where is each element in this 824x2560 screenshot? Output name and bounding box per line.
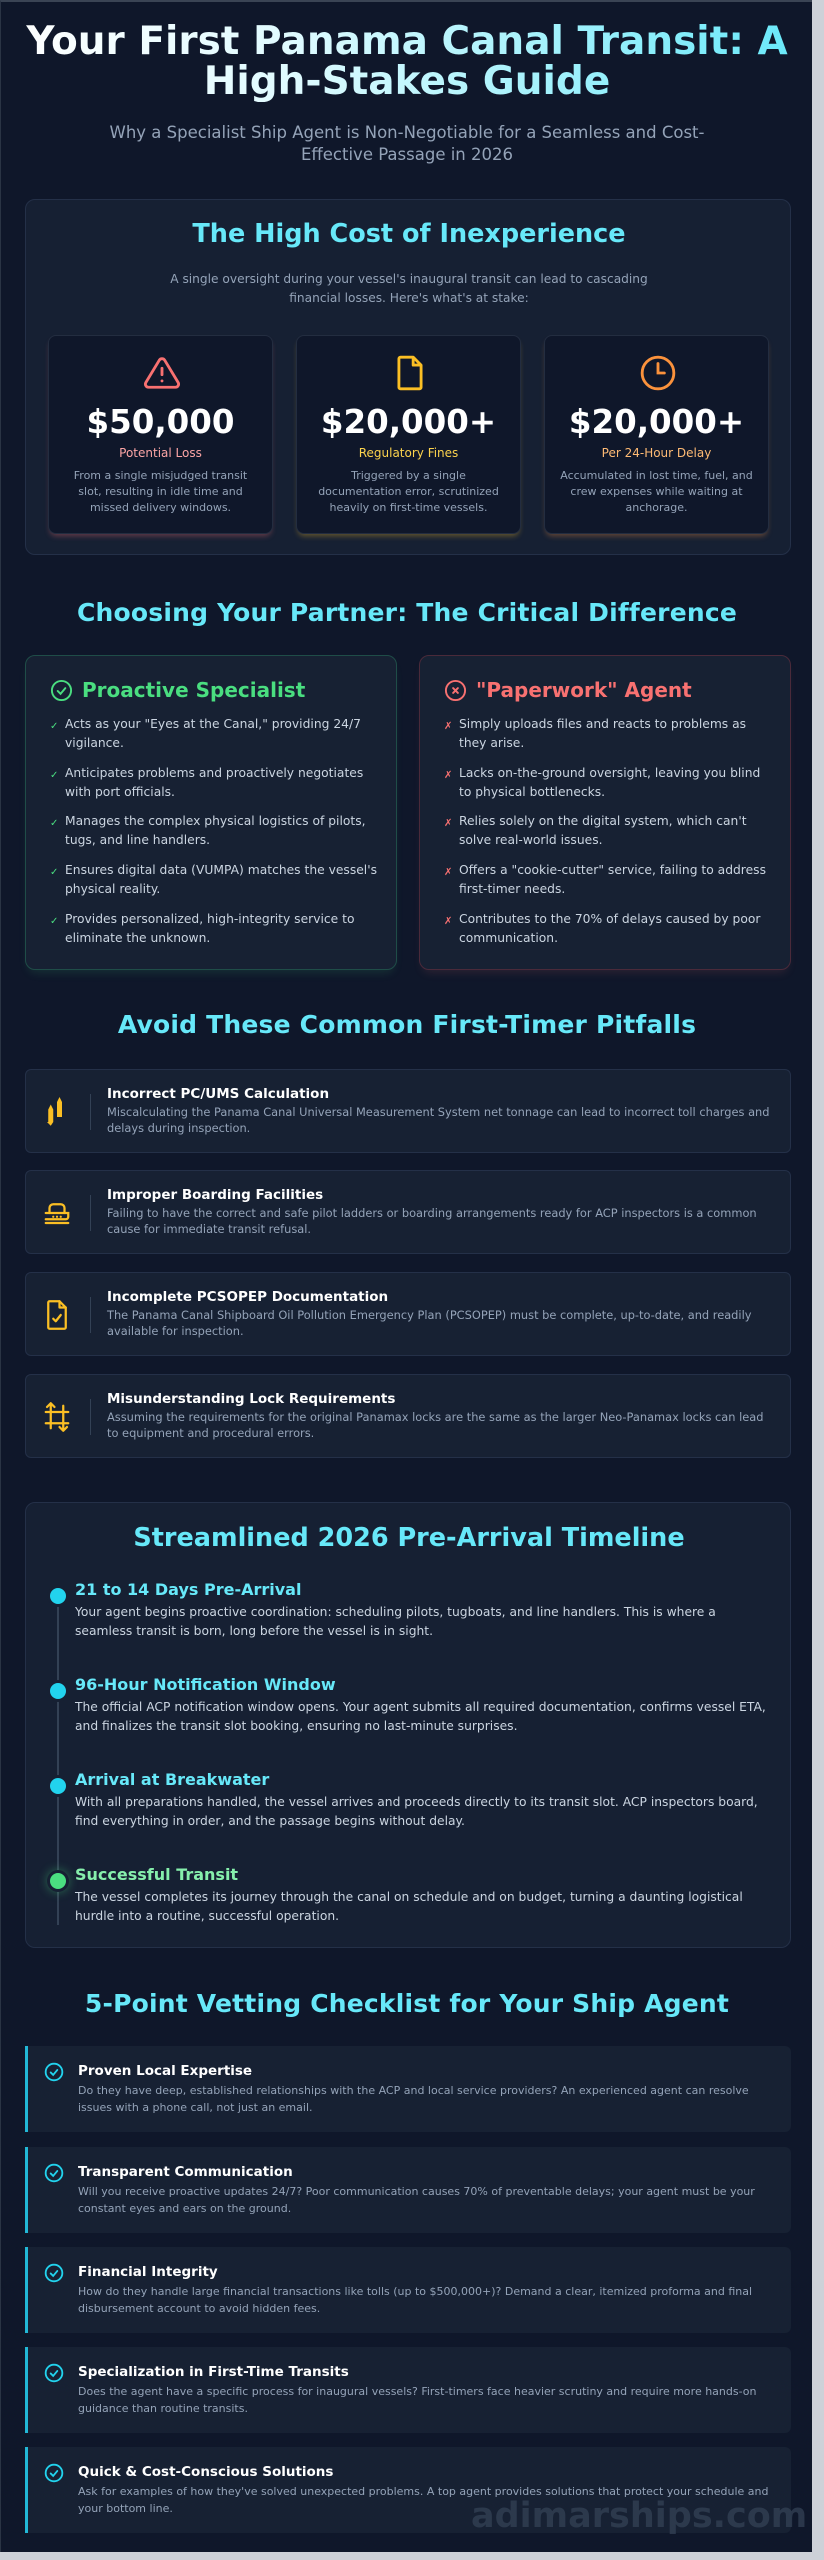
panel: proactive specialist: ✓ [50, 770, 58, 781]
panel: paperwork agent: ✗ [444, 721, 452, 732]
pitfall: PCSOPEP: The Panama Canal Shipboard Oil Pollution Emergency Plan (PCSOPEP) must be complete, up-to-date, and readily available for inspection. [107, 1308, 752, 1338]
panel: paperwork agent: ✗ [444, 818, 452, 829]
icon: warning [144, 357, 180, 389]
checklist 1: Proven Local Expertise [78, 2063, 252, 2079]
watermark: adimarships.com [471, 2496, 807, 2536]
pitfall: PCSOPEP: Incomplete PCSOPEP Documentation [107, 1289, 388, 1305]
card: regulatory fines: $20,000+ [321, 403, 496, 441]
checklist 3 [25, 2247, 791, 2333]
card: delay: $20,000+ [569, 403, 744, 441]
icon: check circle [50, 680, 72, 701]
checklist 5: Quick & Cost-Conscious Solutions [78, 2464, 333, 2480]
panel: paperwork agent: "Paperwork" Agent [476, 678, 692, 702]
icon: clock [640, 356, 676, 390]
panel: proactive specialist: Anticipates problems and proactively negotiates with port officials. [65, 766, 363, 799]
step 2 [50, 1675, 766, 1733]
icon: doc check [47, 1300, 67, 1330]
panel: timeline: Successful Transit [75, 1865, 238, 1884]
checklist 5 [25, 2447, 791, 2533]
card: potential loss: Potential Loss [119, 446, 202, 460]
checklist 2: Transparent Communication [78, 2164, 293, 2180]
panel: paperwork agent: ✗ [444, 867, 452, 878]
panel: high cost [25, 199, 791, 555]
panel: timeline: Your agent begins proactive coordination: scheduling pilots, tugboats, and line handlers. This is where a seamless transit is born, long before the vessel is in sight. [75, 1605, 716, 1638]
intro text: A single oversight during your vessel's inaugural transit can lead to cascading financial losses. Here's what's at stake: [170, 272, 648, 305]
checklist 3: Financial Integrity [78, 2264, 218, 2280]
checklist 4: Specialization in First-Time Transits [78, 2364, 349, 2380]
step 3 [50, 1770, 758, 1828]
card: delay: Per 24-Hour Delay [602, 446, 711, 460]
icon: lock arrows [44, 1402, 70, 1432]
checklist 5: Ask for examples of how they've solved unexpected problems. A top agent provides solutions that protect your schedule and your bottom line. [78, 2485, 768, 2515]
card: regulatory fines: Triggered by a single documentation error, scrutinized heavily on first-time vessels. [318, 469, 499, 514]
icon: x circle [444, 680, 466, 701]
icon: check [44, 2062, 64, 2082]
panel: paperwork agent: ✗ [444, 916, 452, 927]
panel: paperwork agent: Contributes to the 70% of delays caused by poor communication. [459, 912, 760, 945]
heading: choosing your partner: Choosing Your Partner: The Critical Difference [77, 598, 737, 627]
panel: proactive specialist: Ensures digital data (VUMPA) matches the vessel's physical reality. [65, 863, 377, 896]
card: delay [544, 335, 769, 534]
pitfall: PC/UMS [25, 1069, 791, 1153]
heading: timeline: Streamlined 2026 Pre-Arrival Timeline [133, 1523, 685, 1553]
pitfall: locks [25, 1374, 791, 1458]
panel: timeline [25, 1502, 791, 1948]
checklist 4: Does the agent have a specific process for inaugural vessels? First-timers face heavier scrutiny and require more hands-on guidance than routine transits. [78, 2385, 756, 2415]
panel: timeline: The vessel completes its journey through the canal on schedule and on budget, turning a daunting logistical hurdle into a routine, successful operation. [75, 1890, 743, 1923]
panel: timeline: With all preparations handled, the vessel arrives and proceeds directly to its transit slot. ACP inspectors board, find everything in order, and the passage begins without delay. [75, 1795, 758, 1828]
checklist 2 [25, 2147, 791, 2233]
icon: boarding [44, 1203, 70, 1224]
pitfall: boarding: Failing to have the correct and safe pilot ladders or boarding arrangements ready for ACP inspectors is a common cause for immediate transit refusal. [107, 1206, 757, 1236]
icon: check [44, 2164, 64, 2182]
heading: pitfalls: Avoid These Common First-Timer Pitfalls [118, 1010, 696, 1039]
panel: paperwork agent: Offers a "cookie-cutter" service, failing to address first-timer needs. [459, 863, 766, 896]
pitfall: PC/UMS: Incorrect PC/UMS Calculation [107, 1086, 329, 1102]
panel: proactive specialist [25, 655, 397, 970]
step 4 [42, 1865, 743, 1923]
panel: paperwork agent: Simply uploads files and reacts to problems as they arise. [459, 717, 746, 750]
panel: proactive specialist: Acts as your "Eyes at the Canal," providing 24/7 vigilance. [65, 717, 361, 750]
step 1 [50, 1580, 716, 1638]
pitfall: locks: Assuming the requirements for the original Panamax locks are the same as the larger Neo-Panamax locks can lead to equipment and procedural errors. [107, 1410, 764, 1440]
title: Your First Panama Canal Transit: A High-Stakes Guide [26, 19, 788, 104]
heading: high cost: The High Cost of Inexperience [192, 219, 626, 249]
card: regulatory fines [296, 335, 521, 534]
checklist 1 [25, 2046, 791, 2132]
panel: paperwork agent [419, 655, 791, 970]
panel: proactive specialist: ✓ [50, 916, 58, 927]
panel: proactive specialist: Manages the complex physical logistics of pilots, tugs, and line handlers. [65, 814, 366, 847]
panel: proactive specialist: ✓ [50, 867, 58, 878]
panel: timeline: 96-Hour Notification Window [75, 1675, 336, 1694]
panel: timeline: Arrival at Breakwater [75, 1770, 269, 1789]
icon: check [44, 2264, 64, 2282]
pitfall: locks: Misunderstanding Lock Requirements [107, 1391, 395, 1407]
checklist 2: Will you receive proactive updates 24/7? Poor communication causes 70% of preventable delays; your agent must be your constant eyes and ears on the ground. [78, 2185, 755, 2215]
icon: document [398, 356, 422, 390]
checklist 1: Do they have deep, established relationships with the ACP and local service providers? An experienced agent can resolve issues with a phone call, not just an email. [78, 2084, 749, 2114]
pitfall: PCSOPEP [25, 1272, 791, 1356]
panel: paperwork agent: Relies solely on the digital system, which can't solve real-world issues. [459, 814, 747, 847]
pitfall: PC/UMS: Miscalculating the Panama Canal Universal Measurement System net tonnage can lead to incorrect toll charges and delays during inspection. [107, 1105, 770, 1135]
panel: proactive specialist: Provides personalized, high-integrity service to eliminate the unknown. [65, 912, 354, 945]
icon: check [44, 2464, 64, 2482]
panel: proactive specialist: Proactive Specialist [82, 678, 305, 702]
checklist 3: How do they handle large financial transactions like tolls (up to $500,000+)? Demand a clear, itemized proforma and final disbursement account to avoid hidden fees. [78, 2285, 752, 2315]
card: regulatory fines: Regulatory Fines [359, 446, 458, 460]
panel: proactive specialist: ✓ [50, 721, 58, 732]
heading: checklist: 5-Point Vetting Checklist for Your Ship Agent [85, 1989, 729, 2018]
panel: paperwork agent: Lacks on-the-ground oversight, leaving you blind to physical bottlenecks. [459, 766, 760, 799]
checklist 4 [25, 2347, 791, 2433]
pitfall: boarding [25, 1170, 791, 1254]
panel: paperwork agent: ✗ [444, 770, 452, 781]
card: potential loss [48, 335, 273, 534]
icon: check [44, 2364, 64, 2382]
card: potential loss: From a single misjudged transit slot, resulting in idle time and missed delivery windows. [74, 469, 247, 514]
card: potential loss: $50,000 [86, 403, 235, 441]
panel: timeline: The official ACP notification window opens. Your agent submits all required documentation, confirms vessel ETA, and finalizes the transit slot booking, ensuring no last-minute surprises. [75, 1700, 766, 1733]
panel: timeline: 21 to 14 Days Pre-Arrival [75, 1580, 301, 1599]
panel: proactive specialist: ✓ [50, 818, 58, 829]
card: delay: Accumulated in lost time, fuel, and crew expenses while waiting at anchorage. [560, 469, 753, 514]
subtitle: Why a Specialist Ship Agent is Non-Negotiable for a Seamless and Cost-Effective Passage in 2026 [110, 123, 704, 164]
pitfall: boarding: Improper Boarding Facilities [107, 1187, 323, 1203]
icon: scale [47, 1097, 62, 1126]
